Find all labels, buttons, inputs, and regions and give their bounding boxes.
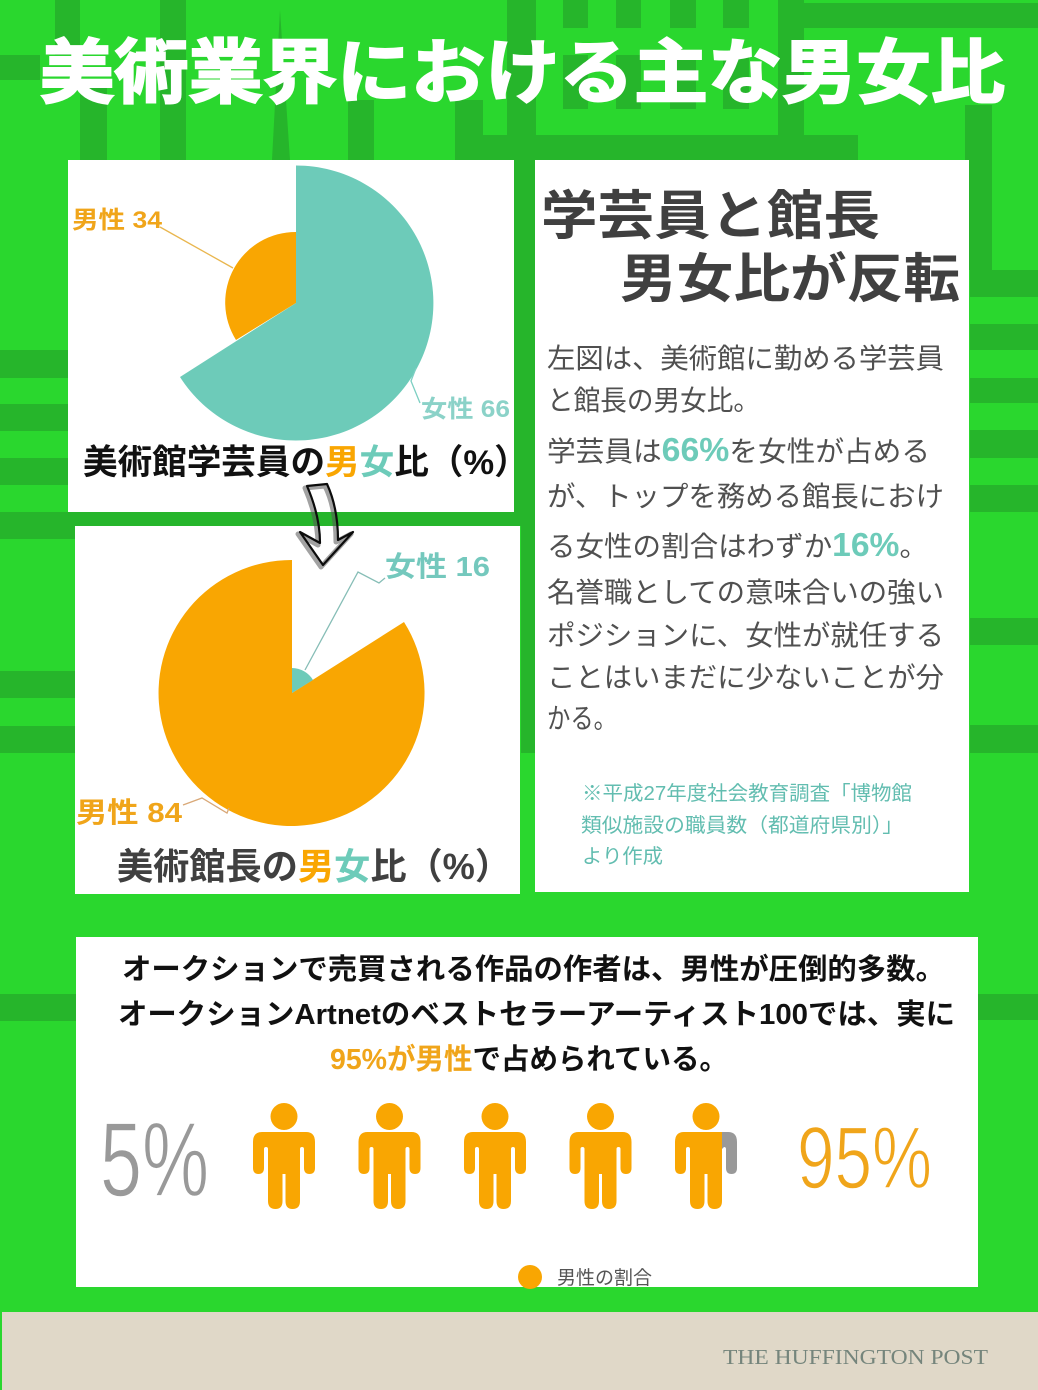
label: male 84: 男性 84 <box>76 797 182 828</box>
body text: かる。 <box>547 703 617 734</box>
stat: 5 percent: 5% <box>100 1101 209 1219</box>
body text: 左図は、美術館に勤める学芸員 <box>547 343 944 374</box>
panel: director pie chart <box>75 526 520 894</box>
pie chart: curators <box>180 166 433 440</box>
footer <box>2 1312 1038 1390</box>
heading: 学芸員と館長 <box>541 187 880 246</box>
arrow: curved down arrow <box>298 484 353 567</box>
pie chart: directors <box>159 560 425 826</box>
legend <box>518 1265 652 1289</box>
title: 美術業界における主な男女比 <box>40 34 1005 112</box>
body text: が、トップを務める館長におけ <box>547 481 944 512</box>
footer brand: THE HUFFINGTON POST <box>723 1345 988 1369</box>
heading: 男女比が反転 <box>620 250 960 309</box>
source note: ※平成27年度社会教育調査「博物館 <box>582 782 912 805</box>
body text: る女性の割合はわずか16%。 <box>547 526 928 563</box>
body text <box>547 343 944 734</box>
stat: 95 percent: 95% <box>797 1108 932 1207</box>
icon: person 3 <box>464 1103 526 1209</box>
body text: ことはいまだに少ないことが分 <box>547 662 944 693</box>
leader: male 34 <box>160 227 233 268</box>
auction text: オークションArtnetのベストセラーアーティスト100では、実に <box>118 998 955 1031</box>
auction text: オークションで売買される作品の作者は、男性が圧倒的多数。 <box>122 952 945 986</box>
source note <box>581 782 912 868</box>
auction text <box>118 952 955 1076</box>
icon: person 5 partly grey <box>675 1103 737 1209</box>
caption: curators: 美術館学芸員の男女比（%） <box>83 444 529 482</box>
body text: 学芸員は66%を女性が占める <box>547 431 930 468</box>
label: female 16: 女性 16 <box>385 551 490 582</box>
heading <box>541 187 960 309</box>
source note: 類似施設の職員数（都道府県別）」 <box>581 814 903 837</box>
label: male 34: 男性 34 <box>72 207 163 234</box>
body text: と館長の男女比。 <box>547 385 760 416</box>
icon: person 4 <box>570 1103 632 1209</box>
panel: auction statistics <box>76 937 978 1289</box>
legend: 男性の割合 <box>557 1267 652 1289</box>
icon: person 2 <box>358 1103 420 1209</box>
auction text: 95%が男性で占められている。 <box>330 1042 728 1076</box>
source note: より作成 <box>582 845 663 868</box>
leader: male 84 <box>183 798 229 813</box>
panel: curator pie chart <box>68 160 529 512</box>
leader: female 66 <box>411 368 420 403</box>
label: female 66: 女性 66 <box>421 396 510 423</box>
body text: 名誉職としての意味合いの強い <box>547 577 944 608</box>
leader: female 16 <box>305 572 385 670</box>
caption: directors: 美術館長の男女比（%） <box>117 846 511 887</box>
panel: explanation <box>535 160 969 892</box>
icon: person 1 <box>253 1103 315 1209</box>
body text: ポジションに、女性が就任する <box>547 620 944 651</box>
